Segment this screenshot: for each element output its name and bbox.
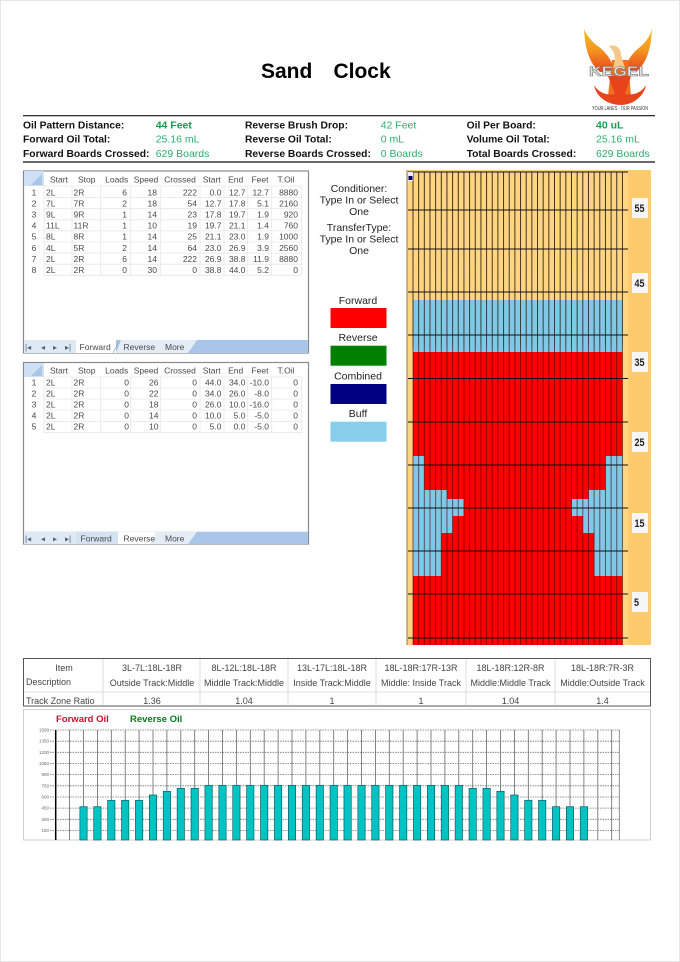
panel: reverse table: 0 bbox=[192, 422, 197, 432]
panel: reverse table: 22 bbox=[149, 388, 159, 398]
panel: forward table: 0 bbox=[293, 265, 298, 275]
panel: forward table: 19 bbox=[188, 221, 197, 231]
panel: forward table: Stop bbox=[78, 175, 96, 185]
summary panel: 629 Boards bbox=[596, 148, 650, 160]
panel: reverse table: 0 bbox=[124, 411, 129, 421]
panel: forward table: End bbox=[228, 175, 244, 185]
legend and conditioner notes: One bbox=[349, 206, 369, 218]
panel: reverse table: 34.0 bbox=[229, 377, 246, 387]
chart legend: Forward Oil bbox=[56, 714, 109, 725]
lane distance labels: 35 bbox=[634, 357, 644, 369]
track zone table: Middle:Outside Track bbox=[560, 678, 645, 688]
panel: forward table: 17.8 bbox=[205, 210, 222, 220]
panel: reverse table: Loads bbox=[105, 366, 128, 376]
panel: forward table: 6 bbox=[32, 243, 37, 253]
logo: Kegel bbox=[584, 29, 652, 112]
summary panel: Oil Pattern Distance: bbox=[23, 120, 124, 132]
track zone table: Item bbox=[55, 663, 73, 673]
legend and conditioner notes: Type In or Select bbox=[320, 194, 398, 206]
buff zone bbox=[413, 300, 622, 352]
panel: forward table: 0 bbox=[192, 265, 197, 275]
panel: reverse table: 10 bbox=[149, 422, 159, 432]
panel: forward table: 2 bbox=[32, 198, 37, 208]
panel: reverse table: 1 bbox=[32, 377, 37, 387]
panel: forward table: 920 bbox=[284, 210, 298, 220]
panel: reverse table: 14 bbox=[149, 411, 159, 421]
panel: forward table: 64 bbox=[188, 243, 197, 253]
panel: forward table: 2160 bbox=[279, 198, 298, 208]
panel: forward table: 4L bbox=[46, 243, 56, 253]
panel: reverse table: 0 bbox=[293, 422, 298, 432]
panel: forward table: 1.4 bbox=[257, 221, 269, 231]
panel: reverse table: 0 bbox=[124, 377, 129, 387]
panel: forward table: 2560 bbox=[279, 243, 298, 253]
panel: forward table: Forward bbox=[80, 342, 111, 352]
summary panel: Reverse Oil Total: bbox=[245, 135, 332, 146]
summary panel: 42 Feet bbox=[381, 120, 416, 132]
panel: reverse table: 4 bbox=[32, 411, 37, 421]
bar chart: oil per board: 600 bbox=[41, 794, 49, 800]
track zone table bbox=[24, 658, 650, 706]
panel: reverse table: 26 bbox=[149, 377, 159, 387]
track zone table: 3L-7L:18L-18R bbox=[122, 663, 183, 673]
panel: forward table: 19.7 bbox=[229, 210, 246, 220]
track zone table: 13L-17L:18L-18R bbox=[297, 663, 368, 673]
summary panel: 40 uL bbox=[596, 120, 624, 132]
panel: forward table: 10 bbox=[148, 221, 157, 231]
panel: forward table: 7 bbox=[32, 254, 37, 264]
panel: reverse table: 2R bbox=[74, 422, 84, 432]
panel: reverse table: 26.0 bbox=[229, 388, 246, 398]
panel: reverse table: |◂ bbox=[25, 534, 31, 544]
panel: reverse table: -16.0 bbox=[250, 400, 269, 410]
panel: forward table: 7L bbox=[46, 198, 56, 208]
panel: reverse table: Start bbox=[203, 366, 221, 376]
panel: forward table: 2L bbox=[46, 254, 56, 264]
panel: reverse table: 10.0 bbox=[205, 411, 222, 421]
panel: forward table: Start bbox=[203, 175, 221, 185]
summary panel: Reverse Brush Drop: bbox=[245, 120, 348, 132]
panel: reverse table: -5.0 bbox=[254, 422, 269, 432]
panel: reverse table: 26.0 bbox=[205, 400, 222, 410]
summary panel: 44 Feet bbox=[156, 120, 192, 132]
track zone table: 1.04 bbox=[235, 696, 253, 706]
panel: forward table: 1.9 bbox=[257, 210, 269, 220]
panel: forward table: 6 bbox=[122, 254, 127, 264]
track zone table: 1 bbox=[418, 696, 424, 706]
panel: forward table: 1000 bbox=[279, 232, 298, 242]
track zone table: 1.36 bbox=[143, 696, 161, 706]
panel: reverse table: 2L bbox=[46, 388, 56, 398]
panel: forward table: 38.8 bbox=[205, 265, 222, 275]
panel: reverse table: 0 bbox=[192, 400, 197, 410]
panel: forward table: 2 bbox=[122, 243, 127, 253]
panel: reverse table: ◂ bbox=[41, 534, 45, 544]
panel: reverse table: 0 bbox=[192, 377, 197, 387]
legend and conditioner notes: Combined bbox=[334, 370, 382, 382]
panel: forward table: 5.1 bbox=[257, 198, 269, 208]
lane distance labels bbox=[632, 198, 648, 612]
summary panel: 25.16 mL bbox=[596, 134, 640, 146]
panel: forward table: Reverse bbox=[124, 342, 155, 352]
bar chart: oil per board: 1050 bbox=[39, 761, 49, 766]
panel: forward table: 0 bbox=[122, 265, 127, 275]
panel: reverse table: ▸| bbox=[65, 534, 71, 544]
panel: forward table bbox=[24, 171, 308, 353]
panel: reverse table: 0 bbox=[124, 388, 129, 398]
panel: forward table: ▸| bbox=[65, 343, 71, 352]
panel: forward table: 2R bbox=[74, 265, 84, 275]
summary panel: Forward Boards Crossed: bbox=[23, 149, 149, 160]
panel: forward table: 23 bbox=[188, 210, 197, 220]
panel: reverse table: 0 bbox=[124, 422, 129, 432]
panel: reverse table: -5.0 bbox=[254, 411, 269, 421]
panel: forward table: 14 bbox=[148, 243, 157, 253]
panel: forward table: 1.9 bbox=[257, 232, 269, 242]
panel: forward table: 38.8 bbox=[229, 254, 246, 264]
summary panel: 0 Boards bbox=[381, 148, 423, 160]
panel: forward table: 12.7 bbox=[205, 198, 222, 208]
legend and conditioner notes bbox=[320, 183, 398, 442]
track zone table: 18L-18R:17R-13R bbox=[384, 663, 458, 673]
panel: reverse table: Stop bbox=[78, 366, 96, 376]
panel: reverse table: 2R bbox=[74, 388, 84, 398]
lane distance labels: 5 bbox=[634, 597, 639, 609]
panel: reverse table: End bbox=[228, 366, 244, 376]
panel: reverse table: T.Oil bbox=[278, 366, 295, 376]
panel: forward table: 14 bbox=[148, 210, 157, 220]
panel: forward table: 1 bbox=[122, 210, 127, 220]
panel: reverse table: 2L bbox=[46, 377, 56, 387]
panel: reverse table: 0.0 bbox=[234, 422, 246, 432]
panel: reverse table: 2R bbox=[74, 411, 84, 421]
buff notches bbox=[413, 456, 622, 576]
panel: forward table: 23.0 bbox=[229, 232, 246, 242]
panel: forward table: 2L bbox=[46, 187, 56, 197]
panel: forward table: 1 bbox=[122, 232, 127, 242]
lane distance labels: 45 bbox=[634, 278, 644, 290]
panel: forward table: Feet bbox=[251, 175, 269, 185]
panel: forward table: 23.0 bbox=[205, 243, 222, 253]
panel: reverse table: Speed bbox=[134, 366, 159, 376]
lane distance labels: 25 bbox=[634, 437, 644, 449]
panel: reverse table: 3 bbox=[32, 400, 37, 410]
panel: forward table: 12.7 bbox=[252, 187, 269, 197]
track zone table: Description bbox=[26, 677, 71, 687]
panel: forward table: 0.0 bbox=[210, 187, 222, 197]
panel: forward table: 12.7 bbox=[229, 187, 246, 197]
summary panel: Total Boards Crossed: bbox=[467, 149, 576, 160]
logo: Kegel: KEGEL bbox=[589, 63, 650, 79]
panel: reverse table: 2L bbox=[46, 411, 56, 421]
bar chart: oil per board: 1350 bbox=[39, 739, 49, 744]
track zone table: 8L-12L:18L-18R bbox=[211, 663, 277, 673]
panel: reverse table: -8.0 bbox=[254, 388, 269, 398]
bar chart: oil per board: 150 bbox=[41, 828, 49, 833]
panel: reverse table: -10.0 bbox=[250, 377, 269, 387]
panel: forward table: 8L bbox=[46, 232, 56, 242]
panel: forward table: Start bbox=[50, 175, 69, 185]
panel: reverse table: 5.0 bbox=[210, 422, 222, 432]
legend and conditioner notes: Conditioner: bbox=[331, 183, 387, 195]
panel: forward table: 2L bbox=[46, 265, 56, 275]
panel: reverse table: 0 bbox=[192, 411, 197, 421]
panel: reverse table: Forward bbox=[80, 534, 112, 544]
panel: reverse table: 0 bbox=[124, 400, 129, 410]
bar chart: oil per board: 1200 bbox=[39, 750, 49, 755]
panel: forward table: T.Oil bbox=[278, 175, 295, 185]
track zone table: 1.04 bbox=[502, 696, 519, 706]
panel: reverse table: 5 bbox=[32, 422, 37, 432]
title: Sand Clock bbox=[261, 60, 391, 83]
panel: reverse table: ▸ bbox=[53, 534, 57, 544]
track zone table: 18L-18R:12R-8R bbox=[476, 663, 545, 673]
track zone table: Middle: Inside Track bbox=[381, 678, 462, 688]
summary panel: Oil Per Board: bbox=[467, 120, 536, 132]
panel: reverse table: Reverse bbox=[124, 534, 155, 544]
track zone table: Middle:Middle Track bbox=[470, 678, 551, 688]
legend and conditioner notes: Forward bbox=[339, 295, 377, 307]
panel: forward table: ▸ bbox=[53, 343, 57, 352]
logo: Kegel: YOUR LANES · OUR PASSION bbox=[592, 106, 648, 112]
track zone table: Inside Track:Middle bbox=[293, 678, 371, 688]
panel: reverse table bbox=[24, 362, 308, 544]
panel: reverse table: 2L bbox=[46, 422, 56, 432]
legend and conditioner notes: One bbox=[349, 245, 369, 257]
panel: forward table: 18 bbox=[148, 198, 157, 208]
summary panel: 629 Boards bbox=[156, 148, 209, 160]
panel: reverse table: 44.0 bbox=[205, 377, 222, 387]
panel: forward table: 8R bbox=[74, 232, 84, 242]
track zone table: 18L-18R:7R-3R bbox=[571, 663, 635, 673]
panel: forward table: Speed bbox=[134, 175, 159, 185]
panel: forward table: 30 bbox=[148, 265, 157, 275]
panel: forward table: |◂ bbox=[25, 343, 31, 352]
chart legend bbox=[56, 714, 182, 725]
track zone table: Outside Track:Middle bbox=[110, 678, 194, 688]
panel: forward table: 14 bbox=[148, 232, 157, 242]
summary panel: Forward Oil Total: bbox=[23, 135, 110, 146]
chart legend: Reverse Oil bbox=[130, 714, 182, 725]
panel: forward table: 222 bbox=[183, 187, 197, 197]
panel: reverse table: Start bbox=[50, 366, 69, 376]
panel: forward table: Loads bbox=[105, 175, 128, 185]
summary panel: Reverse Boards Crossed: bbox=[245, 149, 371, 160]
panel: forward table: 9R bbox=[74, 210, 84, 220]
panel: forward table: Crossed bbox=[164, 175, 196, 185]
panel: forward table: 5R bbox=[74, 243, 84, 253]
panel: forward table: 2R bbox=[74, 187, 84, 197]
legend and conditioner notes: Reverse bbox=[338, 332, 378, 344]
panel: reverse table: 0 bbox=[293, 377, 298, 387]
panel: reverse table: 10.0 bbox=[229, 400, 246, 410]
panel: forward table: 14 bbox=[148, 254, 157, 264]
legend and conditioner notes: TransferType: bbox=[327, 222, 391, 234]
panel: reverse table: 2R bbox=[74, 400, 84, 410]
panel: reverse table: 0 bbox=[293, 388, 298, 398]
panel: forward table: More bbox=[165, 342, 185, 352]
panel: reverse table: 2 bbox=[32, 388, 37, 398]
forward oil zone bbox=[413, 352, 622, 645]
panel: reverse table: 5.0 bbox=[234, 411, 246, 421]
panel: forward table: 18 bbox=[148, 187, 157, 197]
panel: forward table: ◂ bbox=[41, 343, 45, 352]
lane distance labels: 55 bbox=[634, 203, 644, 215]
panel: forward table: 5.2 bbox=[257, 265, 269, 275]
panel: forward table: 6 bbox=[122, 187, 127, 197]
panel: reverse table: 2L bbox=[46, 400, 56, 410]
panel: forward table: 7R bbox=[74, 198, 84, 208]
panel: reverse table: Feet bbox=[251, 366, 269, 376]
panel: forward table: 21.1 bbox=[229, 221, 246, 231]
panel: forward table: 2R bbox=[74, 254, 84, 264]
legend and conditioner notes: Buff bbox=[349, 408, 367, 420]
track zone table: Middle Track:Middle bbox=[204, 678, 284, 688]
bar chart: oil per board: 450 bbox=[41, 806, 49, 811]
panel: reverse table: 2R bbox=[74, 377, 84, 387]
panel: forward table: 222 bbox=[183, 254, 197, 264]
track zone table: Track Zone Ratio bbox=[26, 696, 95, 706]
bar chart: oil per board: 300 bbox=[41, 817, 49, 822]
summary panel: 0 mL bbox=[381, 134, 404, 146]
panel: reverse table: More bbox=[165, 534, 185, 544]
panel: forward table: 26.9 bbox=[229, 243, 246, 253]
summary panel: 25.16 mL bbox=[156, 134, 200, 146]
panel: forward table: 44.0 bbox=[229, 265, 246, 275]
panel: forward table: 54 bbox=[188, 198, 197, 208]
track zone table: 1.4 bbox=[596, 696, 609, 706]
panel: forward table: 25 bbox=[188, 232, 197, 242]
panel: reverse table: 0 bbox=[293, 400, 298, 410]
legend and conditioner notes: Type In or Select bbox=[320, 234, 398, 246]
panel: forward table: 8880 bbox=[279, 254, 298, 264]
panel: forward table: 2 bbox=[122, 198, 127, 208]
panel: reverse table: 34.0 bbox=[205, 388, 222, 398]
panel: forward table: 760 bbox=[284, 221, 298, 231]
panel: forward table: 9L bbox=[46, 210, 56, 220]
panel: forward table: 4 bbox=[32, 221, 37, 231]
panel: forward table: 11.9 bbox=[253, 254, 269, 264]
panel: forward table: 3.9 bbox=[257, 243, 269, 253]
bar chart: oil per board bbox=[24, 710, 650, 840]
panel: forward table: 5 bbox=[32, 232, 37, 242]
panel: reverse table: 18 bbox=[149, 400, 159, 410]
panel: forward table: 8 bbox=[32, 265, 37, 275]
panel: forward table: 21.1 bbox=[205, 232, 222, 242]
bar chart: oil per board: 750 bbox=[41, 783, 49, 788]
chart: lane oil pattern bbox=[407, 170, 651, 645]
panel: reverse table: Crossed bbox=[164, 366, 196, 376]
panel: forward table: 11L bbox=[46, 221, 60, 231]
panel: forward table: 19.7 bbox=[205, 221, 222, 231]
bar chart: oil per board: 1500 bbox=[39, 728, 49, 732]
panel: reverse table: 0 bbox=[293, 411, 298, 421]
lane distance labels: 15 bbox=[634, 518, 644, 530]
summary panel: Volume Oil Total: bbox=[467, 135, 550, 146]
panel: forward table: 3 bbox=[32, 210, 37, 220]
track zone table: 1 bbox=[329, 696, 335, 706]
panel: reverse table: 0 bbox=[192, 388, 197, 398]
panel: forward table: 11R bbox=[74, 221, 88, 231]
panel: forward table: 1 bbox=[122, 221, 127, 231]
panel: forward table: 8880 bbox=[279, 187, 298, 197]
summary panel bbox=[23, 116, 655, 162]
bar chart: oil per board: 900 bbox=[41, 772, 49, 777]
panel: forward table: 17.8 bbox=[229, 198, 246, 208]
panel: forward table: 26.9 bbox=[205, 254, 222, 264]
panel: forward table: 1 bbox=[32, 187, 37, 197]
